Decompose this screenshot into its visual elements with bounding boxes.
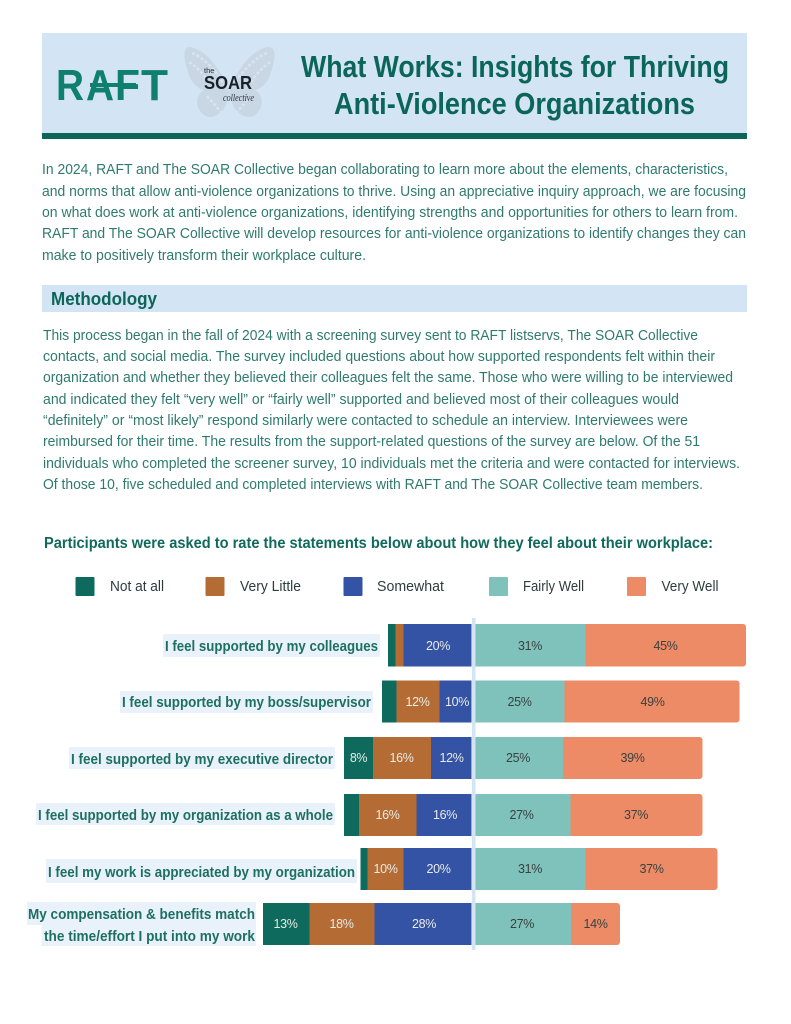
RAFT logo: T bbox=[141, 61, 168, 110]
row: compensation and benefits: 14% bbox=[584, 917, 608, 931]
row: compensation and benefits: 13% bbox=[274, 917, 298, 931]
RAFT logo: A bbox=[86, 61, 114, 110]
row: supported by boss: 49% bbox=[641, 695, 665, 709]
row: supported by colleagues: I feel supported by my colleagues bbox=[165, 638, 378, 655]
row: supported by executive director: 16% bbox=[390, 751, 414, 765]
methodology paragraph: and indicated they felt “very well” or “fairly well” supported and believed most of their colleagues would bbox=[43, 392, 679, 408]
legend: Somewhat bbox=[377, 578, 445, 595]
methodology paragraph: This process began in the fall of 2024 with a screening survey sent to RAFT listservs, The SOAR Collective bbox=[43, 328, 698, 344]
row: supported by organization: 16% bbox=[433, 808, 457, 822]
methodology paragraph: individuals who completed the screener survey, 10 individuals met the criteria and were contacted for interviews. bbox=[43, 456, 740, 472]
methodology paragraph: Of those 10, five scheduled and completed interviews with RAFT and The SOAR Collective team members. bbox=[43, 477, 703, 493]
RAFT logo: R bbox=[56, 61, 84, 110]
stacked bar chart bbox=[27, 618, 746, 950]
methodology paragraph: contacts, and social media. The survey included questions about how supported respondents felt within their bbox=[43, 349, 715, 365]
intro paragraph: and norms that allow anti-violence organizations to thrive. Using an appreciative inquiry approach, we are focusing bbox=[42, 184, 746, 200]
row: supported by boss: I feel supported by my boss/supervisor bbox=[122, 694, 371, 711]
row: work appreciated: 20% bbox=[427, 862, 451, 876]
row: supported by colleagues bbox=[163, 624, 746, 666]
row: compensation and benefits: the time/effort I put into my work bbox=[44, 928, 256, 945]
row: supported by organization: 16% bbox=[376, 808, 400, 822]
intro paragraph bbox=[42, 162, 746, 264]
row: work appreciated: 31% bbox=[518, 862, 542, 876]
row: work appreciated bbox=[46, 848, 718, 890]
row: supported by boss: 12% bbox=[406, 695, 430, 709]
row: compensation and benefits: My compensation & benefits match bbox=[28, 906, 255, 923]
legend: Fairly Well bbox=[523, 578, 584, 595]
row: compensation and benefits bbox=[27, 902, 620, 946]
RAFT logo: F bbox=[115, 61, 140, 110]
row: supported by executive director: I feel supported by my executive director bbox=[71, 751, 333, 768]
row: supported by organization: I feel supported by my organization as a whole bbox=[38, 807, 333, 824]
intro paragraph: on what does work at anti-violence organizations, identifying strengths and opportunities for others to learn from. bbox=[42, 205, 738, 221]
row: supported by boss bbox=[120, 680, 740, 722]
row: supported by executive director: 39% bbox=[621, 751, 645, 765]
title: Anti-Violence Organizations bbox=[334, 86, 695, 121]
SOAR Collective butterfly logo bbox=[184, 47, 274, 117]
methodology paragraph bbox=[43, 328, 740, 493]
row: compensation and benefits: 28% bbox=[412, 917, 436, 931]
row: work appreciated: 37% bbox=[640, 862, 664, 876]
row: supported by executive director: 25% bbox=[506, 751, 530, 765]
RAFT logo bbox=[56, 61, 168, 110]
legend: Not at all bbox=[110, 578, 164, 595]
row: supported by organization: 37% bbox=[624, 808, 648, 822]
methodology paragraph: reimbursed for their time. The results from the support-related questions of the survey are below. Of the 51 bbox=[43, 434, 700, 450]
methodology heading bbox=[42, 285, 747, 312]
methodology heading: Methodology bbox=[51, 289, 157, 309]
row: supported by organization: 27% bbox=[510, 808, 534, 822]
row: supported by executive director bbox=[69, 737, 702, 779]
SOAR Collective butterfly logo: SOAR bbox=[204, 73, 252, 93]
legend: Very Well bbox=[662, 578, 718, 595]
row: supported by boss: 25% bbox=[508, 695, 532, 709]
row: supported by executive director: 8% bbox=[350, 751, 367, 765]
row: compensation and benefits: 27% bbox=[510, 917, 534, 931]
row: work appreciated: I feel my work is appreciated by my organization bbox=[48, 864, 355, 881]
row: supported by organization bbox=[36, 794, 702, 836]
row: supported by executive director: 12% bbox=[440, 751, 464, 765]
header banner bbox=[42, 33, 747, 139]
SOAR Collective butterfly logo: collective bbox=[223, 93, 254, 104]
intro paragraph: RAFT and The SOAR Collective will develop resources for anti-violence organizations to identify changes they can bbox=[42, 226, 746, 242]
row: supported by boss: 10% bbox=[445, 695, 469, 709]
intro paragraph: In 2024, RAFT and The SOAR Collective began collaborating to learn more about the elements, characteristics, bbox=[42, 162, 728, 178]
legend: Very Little bbox=[240, 578, 301, 595]
SOAR Collective butterfly logo: the bbox=[204, 66, 214, 75]
row: supported by colleagues: 31% bbox=[518, 639, 542, 653]
methodology paragraph: organization and whether they believed their colleagues felt the same. Those who were willing to be interviewed bbox=[43, 370, 733, 386]
legend bbox=[76, 577, 718, 596]
title bbox=[301, 49, 729, 121]
methodology paragraph: “definitely” or “most likely” respond similarly were contacted to schedule an interview. Interviewees were bbox=[43, 413, 688, 429]
row: work appreciated: 10% bbox=[374, 862, 398, 876]
title: What Works: Insights for Thriving bbox=[301, 49, 729, 84]
row: supported by colleagues: 20% bbox=[426, 639, 450, 653]
intro paragraph: make to positively transform their workplace culture. bbox=[42, 248, 366, 264]
row: compensation and benefits: 18% bbox=[330, 917, 354, 931]
row: supported by colleagues: 45% bbox=[654, 639, 678, 653]
chart heading: Participants were asked to rate the statements below about how they feel about their workplace: bbox=[44, 535, 713, 552]
